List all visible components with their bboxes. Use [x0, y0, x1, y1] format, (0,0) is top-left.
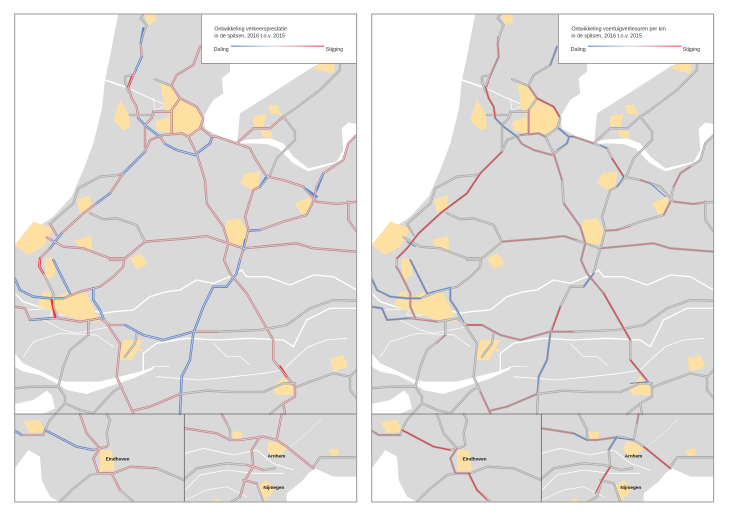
legend box	[558, 14, 714, 63]
label: Arnhem: Arnhem	[268, 453, 285, 458]
label: Nijmegen: Nijmegen	[620, 485, 641, 490]
road network coloured by change in traffic volume	[15, 14, 357, 502]
legend box: Ontwikkeling verkeersprestatie	[214, 27, 287, 33]
panel: ontwikkeling verkeersprestatie	[15, 14, 357, 502]
legend box	[201, 14, 357, 63]
legend box: Stijging	[683, 47, 700, 53]
legend box: in de spitsen, 2016 t.o.v. 2015	[571, 33, 642, 39]
legend box: Ontwikkeling voertuigverliesuren per km	[571, 27, 666, 33]
road network coloured by change in vehicle delay hours	[372, 14, 714, 502]
legend box: in de spitsen, 2016 t.o.v. 2015	[214, 33, 285, 39]
legend box: Daling	[571, 47, 586, 53]
base map: land, water and cities	[372, 14, 714, 502]
map frame	[15, 14, 357, 502]
map frame	[372, 14, 714, 502]
legend box: Stijging	[326, 47, 343, 53]
inset dividers	[15, 414, 357, 502]
base map: land, water and cities	[15, 14, 357, 502]
panel: ontwikkeling voertuigverliesuren per km	[372, 14, 714, 502]
label: Nijmegen: Nijmegen	[263, 485, 284, 490]
label: Eindhoven: Eindhoven	[463, 457, 487, 462]
label: Eindhoven: Eindhoven	[106, 457, 130, 462]
legend box: Daling	[214, 47, 229, 53]
inset dividers	[372, 414, 714, 502]
label: Arnhem: Arnhem	[625, 453, 642, 458]
